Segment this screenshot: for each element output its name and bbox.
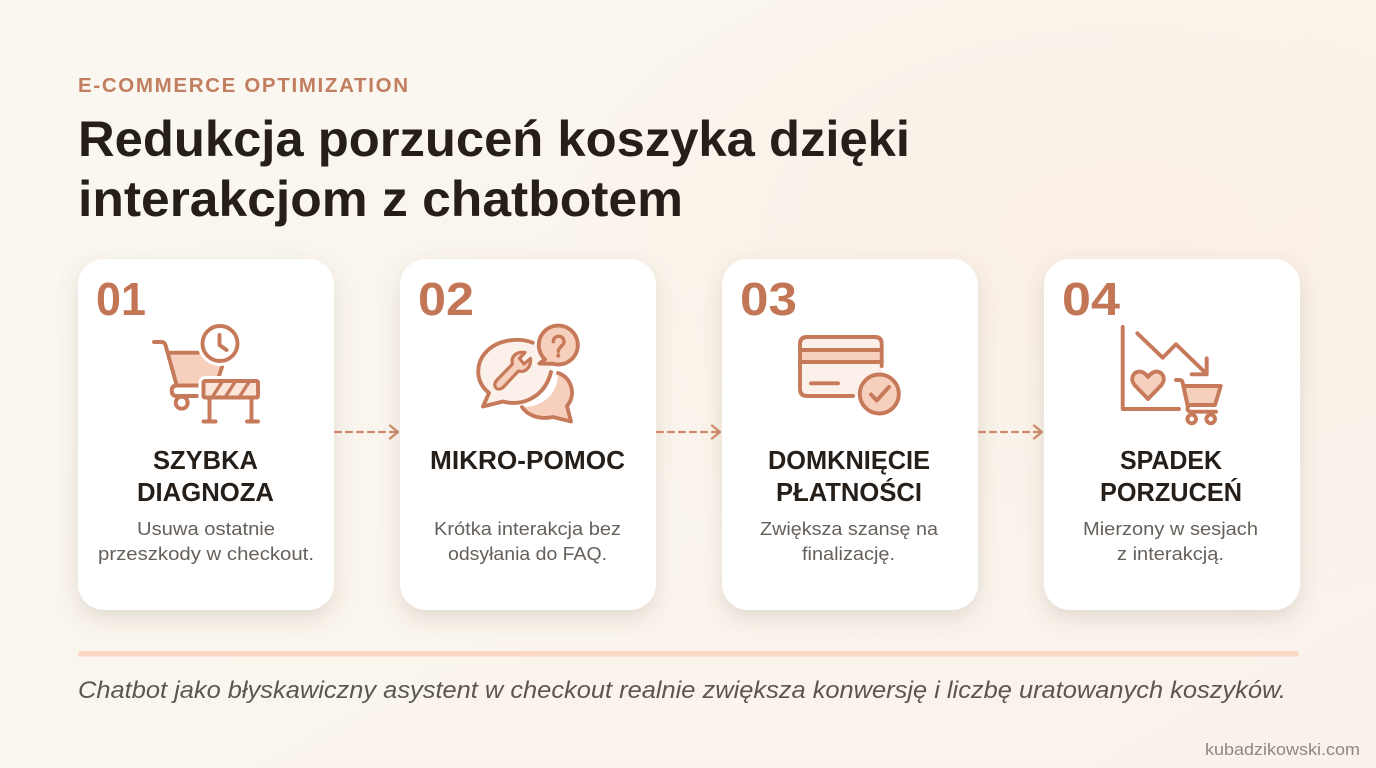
panel: step 4 <box>1044 259 1300 610</box>
arrow: step 2 to 3 <box>657 426 720 438</box>
heading: DOMKNIĘCIE <box>768 445 930 475</box>
icon: cart with clock and barrier <box>154 326 258 422</box>
panel: step 3: PŁATNOŚCI <box>776 477 922 507</box>
panel: step 2 <box>400 259 656 610</box>
panel: step 2: odsyłania do FAQ. <box>448 543 607 564</box>
step number 04: 04 <box>1062 273 1120 325</box>
panel: step 1: DIAGNOZA <box>137 477 274 507</box>
panel: step 4: z interakcją. <box>1117 543 1224 564</box>
panel: step 3 <box>722 259 978 610</box>
step number 03: 03 <box>740 273 797 325</box>
title: Redukcja porzuceń koszyka dzięki <box>78 111 910 167</box>
panel: step 4: PORZUCEŃ <box>1100 477 1242 507</box>
arrow: step 3 to 4 <box>979 426 1042 438</box>
eyebrow label: E-COMMERCE OPTIMIZATION <box>78 74 408 97</box>
description: Mierzony w sesjach <box>1083 518 1258 539</box>
icon: speech bubbles with wrench and question mark <box>478 326 578 422</box>
arrow: step 1 to 2 <box>335 426 398 438</box>
title <box>78 111 910 227</box>
watermark: kubadzikowski.com <box>1205 741 1360 759</box>
description: Zwiększa szansę na <box>760 518 939 539</box>
description: Usuwa ostatnie <box>137 518 275 539</box>
heading: MIKRO-POMOC <box>430 445 625 475</box>
icon: falling chart with heart and cart <box>1123 327 1221 423</box>
heading: SPADEK <box>1120 445 1222 475</box>
step number 01: 01 <box>96 273 146 325</box>
closing statement: Chatbot jako błyskawiczny asystent w checkout realnie zwiększa konwersję i liczbę uratowanych koszyków. <box>78 677 1286 704</box>
panel: step 1 <box>78 259 334 610</box>
description: Krótka interakcja bez <box>434 518 621 539</box>
panel: step 3: finalizację. <box>802 543 895 564</box>
heading: SZYBKA <box>153 445 258 475</box>
panel: step 1: przeszkody w checkout. <box>98 543 314 564</box>
title: interakcjom z chatbotem <box>78 171 683 227</box>
icon: payment card with check <box>800 337 899 414</box>
step number 02: 02 <box>418 273 474 325</box>
